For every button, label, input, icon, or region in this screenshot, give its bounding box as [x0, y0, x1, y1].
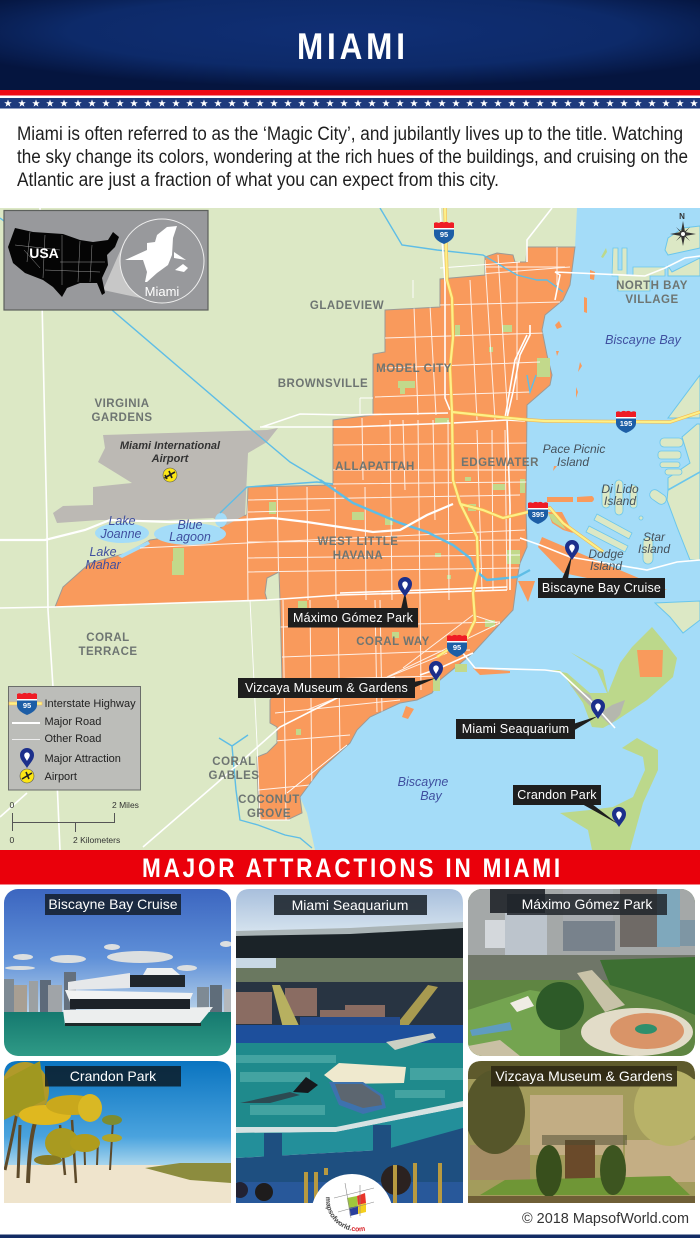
shield: I-195: 195: [620, 419, 632, 428]
water labels: Joanne: [99, 527, 142, 541]
section banner: MAJOR ATTRACTIONS IN MIAMI: [142, 854, 560, 883]
place labels: BROWNSVILLE: [278, 378, 368, 390]
canal in Miami Beach: [668, 472, 700, 490]
scale bar: 2 Miles: [112, 800, 139, 810]
callout: Biscayne Bay Cruise: [538, 540, 665, 598]
shield: I-395: [528, 502, 548, 524]
island labels: [543, 442, 670, 573]
water labels: Lake: [108, 514, 136, 528]
airport label: [120, 440, 221, 465]
land: Watson Island park: [548, 514, 566, 530]
water labels: Mahar: [85, 558, 122, 572]
callout: Máximo Gómez Park: Máximo Gómez Park: [293, 611, 414, 625]
scale bar: [10, 800, 139, 845]
place labels: GROVE: [247, 808, 291, 820]
inset circle: [120, 219, 204, 303]
legend: attraction: Major Attraction: [44, 753, 121, 765]
airport label: Miami International: [120, 440, 221, 452]
water labels: Blue: [177, 518, 203, 532]
callout: Máximo Gómez Park: [288, 577, 418, 628]
caption: Miami Seaquarium: Miami Seaquarium: [292, 897, 408, 913]
callout: Crandon Park: [513, 785, 626, 827]
photo: Miami Seaquarium: [232, 889, 463, 1203]
icon: compass: [670, 212, 696, 246]
island labels: Island: [638, 542, 670, 556]
icon: compass: N: [679, 212, 685, 221]
island labels: Pace Picnic: [543, 442, 605, 456]
inset cone: [103, 240, 150, 300]
shield: I-95 south: 95: [453, 643, 461, 652]
place labels: ALLAPATTAH: [335, 461, 415, 473]
caption: Vizcaya Museum & Gardens: Vizcaya Museum & Gardens: [495, 1068, 673, 1084]
land: Fisher Island: [655, 601, 700, 633]
usa label: USA: [29, 245, 59, 261]
water labels: Lagoon: [169, 530, 211, 544]
caption: Máximo Gómez Park: [507, 894, 667, 915]
land: North Bay Village: [612, 248, 665, 291]
place labels: TERRACE: [78, 646, 138, 658]
land: Venetian and Star islands: [586, 438, 683, 564]
miami silhouette: [125, 226, 188, 282]
highways: [437, 208, 700, 657]
land base: [0, 208, 577, 850]
caption: Crandon Park: Crandon Park: [70, 1068, 157, 1084]
street grid: [140, 247, 570, 820]
scale bar: 0: [10, 800, 14, 810]
water labels: Biscayne Bay: [605, 333, 682, 347]
water labels: Biscayne: [398, 775, 448, 789]
place labels: GLADEVIEW: [310, 300, 384, 312]
major roads: [0, 208, 700, 850]
airport area: [53, 428, 278, 525]
legend: interstate: Interstate Highway: [44, 698, 136, 710]
caption: Crandon Park: [45, 1066, 181, 1086]
header banner: [0, 0, 700, 108]
place labels: VIRGINIA: [94, 398, 150, 410]
island labels: Island: [557, 455, 589, 469]
legend: other road: Other Road: [44, 733, 101, 745]
shield: I-95 north: [434, 222, 454, 244]
place labels: NORTH BAY: [616, 280, 688, 292]
photo: Máximo Gómez Park: [468, 889, 695, 1056]
shield: I-395: 395: [532, 510, 544, 519]
place labels: CORAL WAY: [356, 636, 430, 648]
photo: Biscayne Bay Cruise: [4, 889, 232, 1056]
land: triangle island: [518, 581, 535, 602]
land: Watson Island: [548, 512, 573, 533]
place labels: EDGEWATER: [461, 457, 539, 469]
place labels: VILLAGE: [625, 294, 679, 306]
place labels: [78, 280, 688, 820]
scale bar: 2 Kilometers: [73, 835, 120, 845]
callout: Miami Seaquarium: [456, 699, 605, 739]
scale bar: 0: [10, 835, 14, 845]
callout: Vizcaya Museum & Gardens: [238, 661, 443, 698]
locator inset: [4, 210, 208, 310]
lakes: [95, 513, 227, 558]
island labels: Island: [604, 494, 636, 508]
legend: [8, 686, 140, 790]
caption: Biscayne Bay Cruise: Biscayne Bay Cruise: [48, 896, 178, 912]
usa map: [8, 228, 119, 297]
land: north-east islands: [665, 226, 700, 276]
place labels: CORAL: [86, 632, 130, 644]
island labels: Star: [643, 530, 666, 544]
callout: Vizcaya Museum & Gardens: Vizcaya Museum & Gardens: [245, 681, 408, 695]
callout: Crandon Park: Crandon Park: [517, 788, 597, 802]
callout: Biscayne Bay Cruise: Biscayne Bay Cruise: [542, 581, 661, 595]
icon: airport: [163, 468, 177, 482]
intro text block: [17, 124, 688, 191]
other roads: [250, 262, 520, 820]
land: small bay islands: [553, 270, 595, 471]
miami label: Miami: [145, 284, 179, 299]
shield: I-95 north: 95: [440, 230, 448, 239]
footer bar: [0, 1234, 700, 1238]
caption: Máximo Gómez Park: Máximo Gómez Park: [522, 896, 653, 912]
land: Dodge Island: [538, 537, 667, 590]
water: Biscayne Bay: [300, 208, 700, 850]
legend: interstate: [9, 693, 136, 715]
intro text block: Atlantic are just a fraction of what you can expect from this city.: [17, 170, 499, 191]
panel: map: [0, 208, 700, 850]
photo: Vizcaya Museum & Gardens: [465, 1061, 700, 1203]
shield: I-195: [616, 411, 636, 433]
waterways: [0, 208, 563, 848]
land: Virginia Key: [550, 627, 677, 728]
city area: Miami: [55, 247, 575, 820]
highway inner yellow: [437, 208, 700, 657]
section banner: [0, 850, 700, 884]
state lines: [15, 232, 105, 285]
place labels: HAVANA: [333, 550, 383, 562]
place labels: CORAL: [212, 756, 256, 768]
title: MIAMI: [297, 27, 405, 68]
legend: major road: Major Road: [44, 716, 101, 728]
land: Miami Beach: [667, 375, 700, 560]
parks: [172, 325, 550, 735]
causeway islands: [402, 496, 594, 719]
water labels: [85, 333, 682, 803]
place labels: GABLES: [209, 770, 259, 782]
island labels: Island: [590, 559, 622, 573]
water labels: Bay: [420, 789, 443, 803]
logo: MapsofWorld: mapsofworld.com: [326, 1197, 365, 1232]
island labels: Dodge: [588, 547, 624, 561]
island labels: Di Lido: [601, 482, 639, 496]
place labels: MODEL CITY: [376, 363, 452, 375]
place labels: WEST LITTLE: [318, 536, 398, 548]
place labels: GARDENS: [91, 412, 153, 424]
copyright: © 2018 MapsofWorld.com: [522, 1211, 689, 1227]
shield: I-95 south: [447, 635, 467, 657]
land: small green island: [601, 248, 607, 258]
logo: MapsofWorld: [312, 1174, 392, 1232]
land: Virginia Key grey road area: [570, 685, 625, 725]
place labels: COCONUT: [238, 794, 300, 806]
airport label: Airport: [151, 453, 190, 465]
legend: interstate: 95: [23, 701, 31, 710]
land: Key Biscayne and Crandon Park: [560, 738, 658, 850]
land: Virginia Key orange patch: [637, 650, 663, 677]
legend: airport: Airport: [44, 771, 77, 783]
caption: Miami Seaquarium: [274, 895, 427, 915]
photo: Crandon Park: [1, 1061, 231, 1203]
callout: Miami Seaquarium: Miami Seaquarium: [462, 722, 569, 736]
water labels: Lake: [89, 545, 117, 559]
